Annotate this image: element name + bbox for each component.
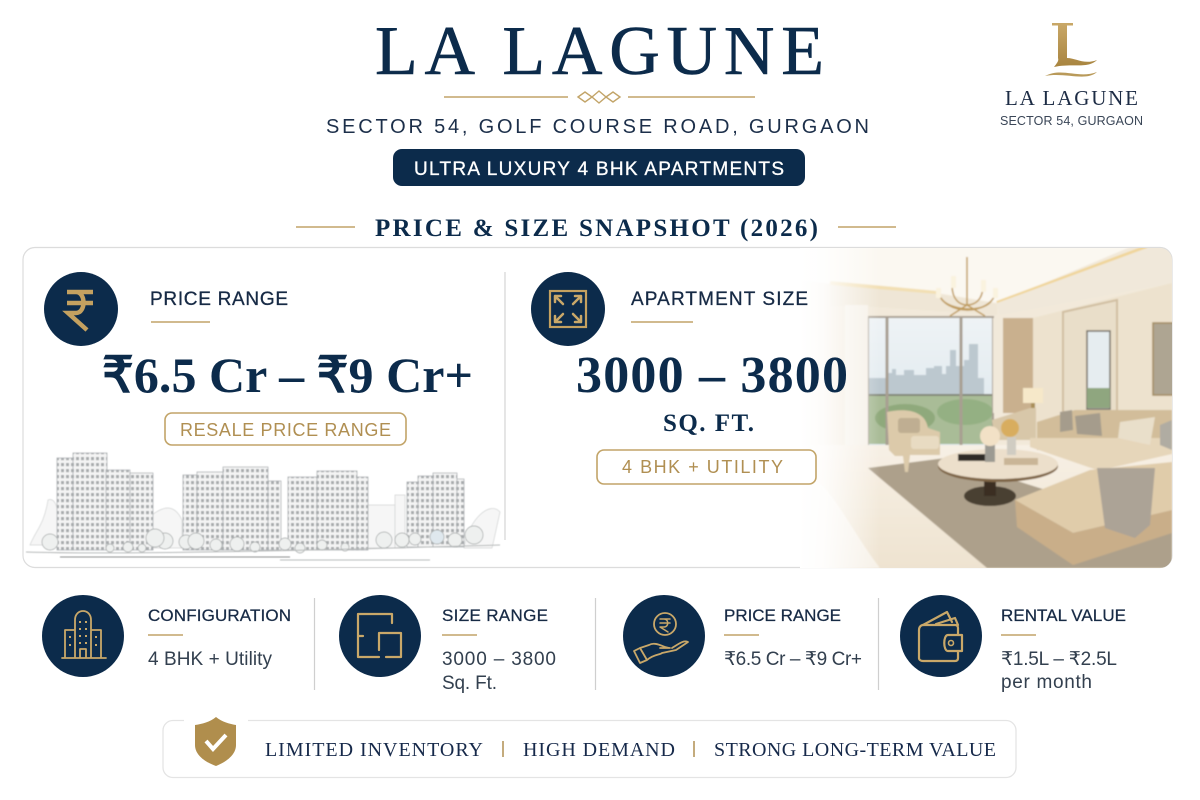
value: price: ₹6.5 Cr – ₹9 Cr+ [102, 347, 473, 403]
throw blanket [1097, 468, 1155, 538]
icon: expand [531, 272, 605, 346]
tag: 4 BHK + utility: 4 BHK + UTILITY [622, 457, 783, 477]
wall [1033, 284, 1172, 422]
tower group 2 [183, 467, 281, 550]
icon: shield [195, 717, 236, 766]
stat: price range: ₹6.5 Cr – ₹9 Cr+ [724, 649, 862, 670]
coffee table [964, 486, 1016, 506]
unit: sq ft: SQ. FT. [663, 410, 754, 437]
armchair [887, 410, 940, 472]
pill: ultra luxury [393, 149, 805, 186]
ground lines [26, 545, 500, 560]
stat: price range: PRICE RANGE [724, 606, 841, 625]
label: price range [150, 289, 288, 322]
photo: living room [790, 240, 1180, 575]
stat: size range: SIZE RANGE [442, 606, 548, 625]
stat: rental value: RENTAL VALUE [1001, 606, 1126, 625]
icon: floor plan [339, 595, 421, 677]
background sketch trees [30, 495, 500, 548]
painting [1153, 323, 1175, 395]
tag: resale price range: RESALE PRICE RANGE [180, 420, 391, 440]
subtitle location: SECTOR 54, GOLF COURSE ROAD, GURGAON [326, 116, 869, 138]
floor [867, 444, 1172, 568]
pill: ultra luxury: ULTRA LUXURY 4 BHK APARTMENTS [414, 159, 784, 180]
stat: rental value [900, 595, 1126, 693]
stat: rental value: ₹1.5L – ₹2.5L [1001, 649, 1117, 670]
banner: key benefits: LIMITED INVENTORY [265, 739, 483, 761]
stat: rental value: per month [1001, 672, 1092, 693]
curtains [848, 305, 869, 446]
banner: key benefits: HIGH DEMAND [523, 739, 675, 761]
logo [1000, 23, 1143, 128]
second armchair [992, 408, 1036, 440]
flowers [985, 442, 995, 462]
window [868, 317, 993, 447]
stat: size range: 3000 – 3800 [442, 649, 556, 670]
stat: size range: Sq. Ft. [442, 673, 497, 694]
section heading: PRICE & SIZE SNAPSHOT (2026) [375, 215, 818, 242]
stat: configuration [42, 595, 291, 677]
lamp [1023, 388, 1043, 403]
stat: size range [339, 595, 556, 694]
icon: rupee [44, 272, 118, 346]
ceiling [838, 248, 1128, 303]
banner: key benefits [163, 716, 1016, 778]
trees [42, 526, 483, 553]
icon: wallet [900, 595, 982, 677]
logo: LA LAGUNE [1005, 86, 1138, 110]
rug [868, 458, 1172, 568]
value: size: 3000 – 3800 [576, 347, 848, 404]
ornament divider [444, 91, 755, 103]
panel: price and size [23, 240, 1180, 575]
label: apartment size: APARTMENT SIZE [631, 289, 808, 310]
tower group 4 [407, 473, 464, 547]
tower group 3 [288, 471, 368, 550]
label: price range: PRICE RANGE [150, 289, 288, 310]
illustration: building sketch [26, 453, 500, 560]
icon: buildings [42, 595, 124, 677]
stat: configuration: CONFIGURATION [148, 606, 291, 625]
tag: 4 BHK + utility [597, 450, 816, 484]
chaise [1015, 462, 1172, 533]
banner: key benefits: STRONG LONG-TERM VALUE [714, 739, 996, 761]
tower group 1 [57, 453, 153, 550]
door and inner window [1063, 300, 1117, 412]
sofa [1036, 409, 1172, 438]
photo fade [800, 248, 880, 568]
logo: SECTOR 54, GURGAON [1000, 114, 1143, 128]
stat: configuration: 4 BHK + Utility [148, 649, 272, 670]
icon: rupee in hand [623, 595, 705, 677]
tag: resale price range [165, 413, 406, 445]
stat: price range [623, 595, 862, 677]
chandelier [938, 257, 996, 316]
title: LA LAGUNE [375, 13, 824, 90]
